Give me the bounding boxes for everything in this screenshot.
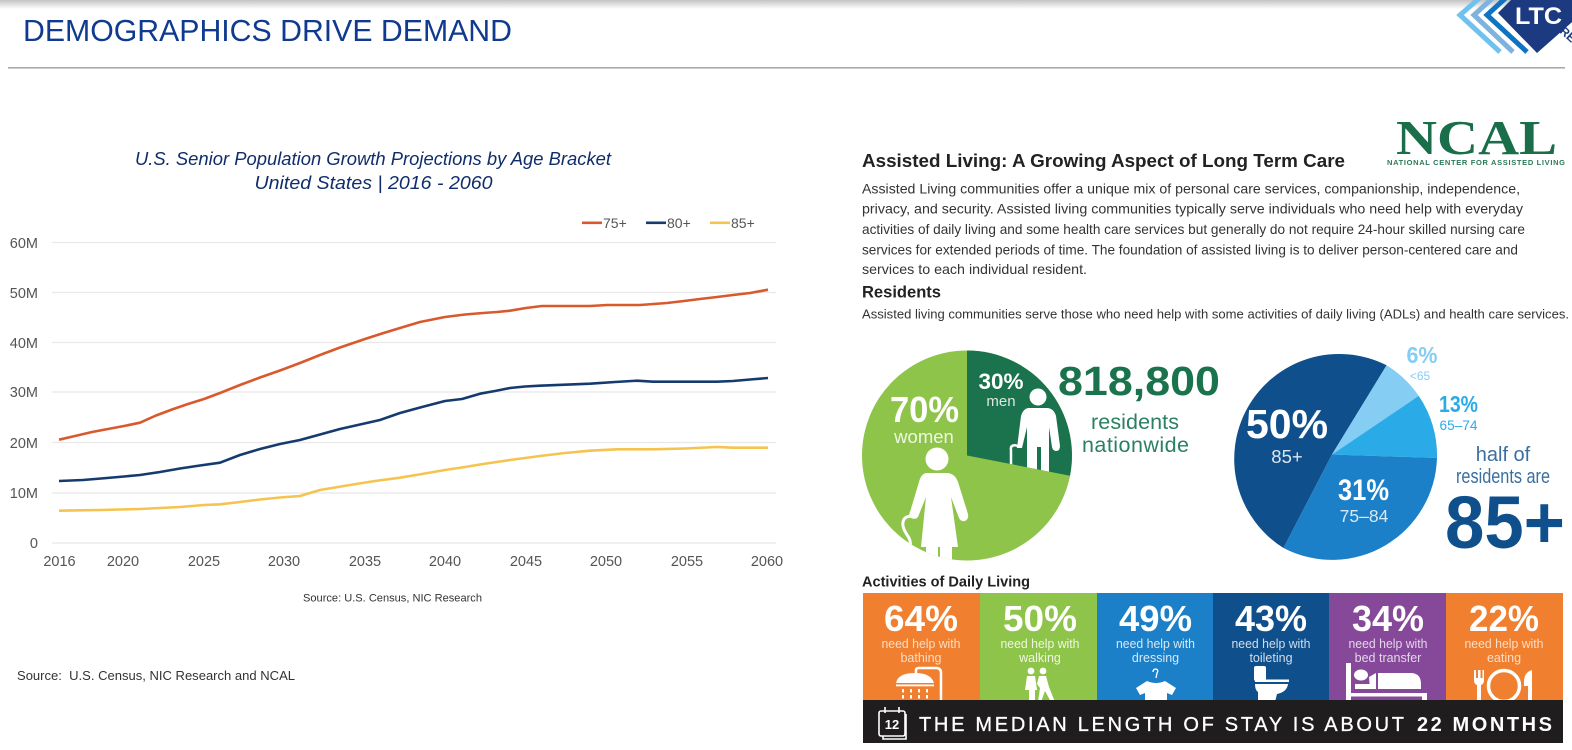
tile: toileting: toileting: [1249, 651, 1293, 665]
label: 30% men: [978, 369, 1024, 410]
icon: NCAL logo: NATIONAL CENTER FOR ASSISTED LIVING: [1387, 158, 1565, 167]
tile: walking: walking: [1018, 651, 1061, 665]
line chart: 2025: [188, 554, 220, 570]
label: 70% women: women: [893, 426, 954, 447]
line chart: 2045: [510, 554, 542, 570]
label: 30% men: 30%: [978, 369, 1024, 394]
text block: assisted living description: services to each individual resident.: [862, 261, 1087, 277]
label: 6% under 65: <65: [1410, 369, 1431, 383]
stat: 818,800 residents nationwide: 818,800: [1058, 358, 1220, 404]
label: 50% 85+: [1246, 401, 1328, 467]
icon: woman with cane: [903, 448, 968, 562]
tile: bed transfer: bed transfer: [1355, 651, 1421, 665]
tile: eating: 22%: [1469, 598, 1539, 639]
line chart: [10, 236, 783, 570]
icon: plate and cutlery: [1474, 670, 1532, 702]
tile: walking: 50%: [1003, 598, 1077, 639]
text block: residents description: Assisted living communities serve those who need help with some activities of daily living (ADLs) and health care services.: [862, 306, 1569, 322]
text block: assisted living description: privacy, and security. Assisted living communities typically serve individuals who need help with everyday: [862, 200, 1523, 216]
label: 13% 65-74: 65–74: [1440, 417, 1478, 433]
pie chart: gender: [862, 350, 1072, 562]
stat: half of residents are 85+: half of: [1476, 444, 1531, 466]
tile: toileting: 43%: [1235, 598, 1307, 639]
footnote source: Source: U.S. Census, NIC Research and NCAL: [17, 669, 295, 683]
tile: bed transfer: need help with: [1348, 637, 1428, 651]
chart title: U.S. Senior Population Growth Projections by Age Bracket: [135, 149, 612, 169]
label: 30% men: men: [986, 393, 1016, 410]
line chart: 2040: [429, 554, 461, 570]
line chart: 10M: [10, 486, 38, 502]
label: 31% 75-84: 75–84: [1340, 506, 1389, 526]
line chart: 20M: [10, 436, 38, 452]
icon: LTC logo: LTC: [1515, 3, 1562, 30]
line chart: 2050: [590, 554, 622, 570]
line chart: 60M: [10, 236, 38, 252]
icon: man with cane: [1011, 388, 1060, 475]
heading: activities of daily living: Activities of Daily Living: [862, 574, 1030, 590]
tile: bathing: need help with: [882, 637, 961, 651]
heading: residents: Residents: [862, 284, 941, 302]
legend: [582, 215, 755, 231]
icon: two people walking: [1025, 668, 1055, 702]
label: 6% under 65: [1406, 342, 1438, 383]
tile: eating: [1446, 593, 1563, 702]
line chart: 2055: [671, 554, 703, 570]
label: 70% women: [890, 389, 959, 447]
stat: 818,800 residents nationwide: [1058, 358, 1220, 457]
tile: walking: need help with: [1000, 637, 1080, 651]
label: 50% 85+: 85+: [1271, 446, 1303, 467]
line chart: 2035: [349, 554, 381, 570]
tile: bathing: 64%: [884, 598, 958, 639]
line chart: 2030: [268, 554, 300, 570]
line chart: 2060: [751, 554, 783, 570]
line chart: 40M: [10, 336, 38, 352]
tile: bed transfer: 34%: [1352, 598, 1424, 639]
stat: 818,800 residents nationwide: residents: [1091, 410, 1179, 434]
tile: bed transfer: [1329, 593, 1446, 703]
tile: eating: eating: [1487, 651, 1521, 665]
chart source: Source: U.S. Census, NIC Research: [303, 592, 482, 604]
banner: median length of stay: THE MEDIAN LENGTH OF STAY IS ABOUT: [919, 714, 1404, 736]
stat: 818,800 residents nationwide: nationwide: [1082, 433, 1189, 457]
pie chart: age: [1234, 354, 1437, 560]
banner: median length of stay: 22 MONTHS: [1417, 714, 1552, 736]
icon: calendar: 12: [885, 717, 899, 732]
stat: half of residents are 85+: residents are: [1456, 466, 1550, 488]
label: 70% women: 70%: [890, 389, 959, 430]
chart title: [135, 149, 612, 193]
line chart: 0: [30, 536, 38, 552]
heading: assisted living: Assisted Living: A Growing Aspect of Long Term Care: [862, 150, 1345, 171]
stat: half of residents are 85+: 85+: [1445, 481, 1565, 564]
icon: shower: [896, 668, 941, 702]
label: 6% under 65: 6%: [1406, 342, 1438, 368]
text block: assisted living description: services for extended periods of time. The foundation of assisted living is to deliver person-centered care and: [862, 242, 1518, 258]
tile: dressing: dressing: [1132, 651, 1179, 665]
label: 13% 65-74: [1439, 391, 1478, 433]
label: 13% 65-74: 13%: [1439, 391, 1478, 417]
legend: 85+: [731, 215, 755, 231]
icon: toilet: [1254, 666, 1289, 702]
icon: NCAL logo: NCAL: [1396, 110, 1557, 165]
tile: walking: [980, 593, 1097, 702]
icon: shirt on hanger: [1136, 669, 1176, 702]
tile: toileting: [1213, 593, 1329, 702]
tile: eating: need help with: [1464, 637, 1544, 651]
line chart: 50M: [10, 286, 38, 302]
icon: calendar: [879, 707, 906, 739]
label: 50% 85+: 50%: [1246, 401, 1328, 447]
label: 31% 75-84: 31%: [1338, 474, 1389, 507]
tile: dressing: 49%: [1119, 598, 1192, 639]
tile: dressing: [1097, 593, 1213, 702]
stat: half of residents are 85+: [1445, 444, 1565, 564]
text block: assisted living description: Assisted Living communities offer a unique mix of personal care services, companionship, independence,: [862, 180, 1520, 196]
icon: person in bed: [1346, 663, 1427, 703]
tile: bathing: bathing: [900, 651, 942, 665]
title: DEMOGRAPHICS DRIVE DEMAND: [23, 13, 512, 48]
text block: assisted living description: [862, 180, 1525, 277]
legend: 80+: [667, 215, 691, 231]
line chart: 2016: [43, 554, 76, 570]
line chart: 2020: [107, 554, 139, 570]
label: 31% 75-84: [1338, 474, 1389, 526]
line chart: 30M: [10, 385, 38, 401]
text block: assisted living description: activities of daily living and some health care services but generally do not require 24-hour skilled nursing care: [862, 221, 1525, 237]
panel: activities of daily living tiles: [863, 593, 1563, 703]
tile: dressing: need help with: [1116, 637, 1195, 651]
chart title: United States | 2016 - 2060: [254, 173, 492, 193]
tile: bathing: [863, 593, 980, 702]
tile: toileting: need help with: [1232, 637, 1311, 651]
icon: LTC logo: [1460, 0, 1572, 53]
banner: median length of stay: [863, 700, 1563, 743]
legend: 75+: [603, 215, 627, 231]
